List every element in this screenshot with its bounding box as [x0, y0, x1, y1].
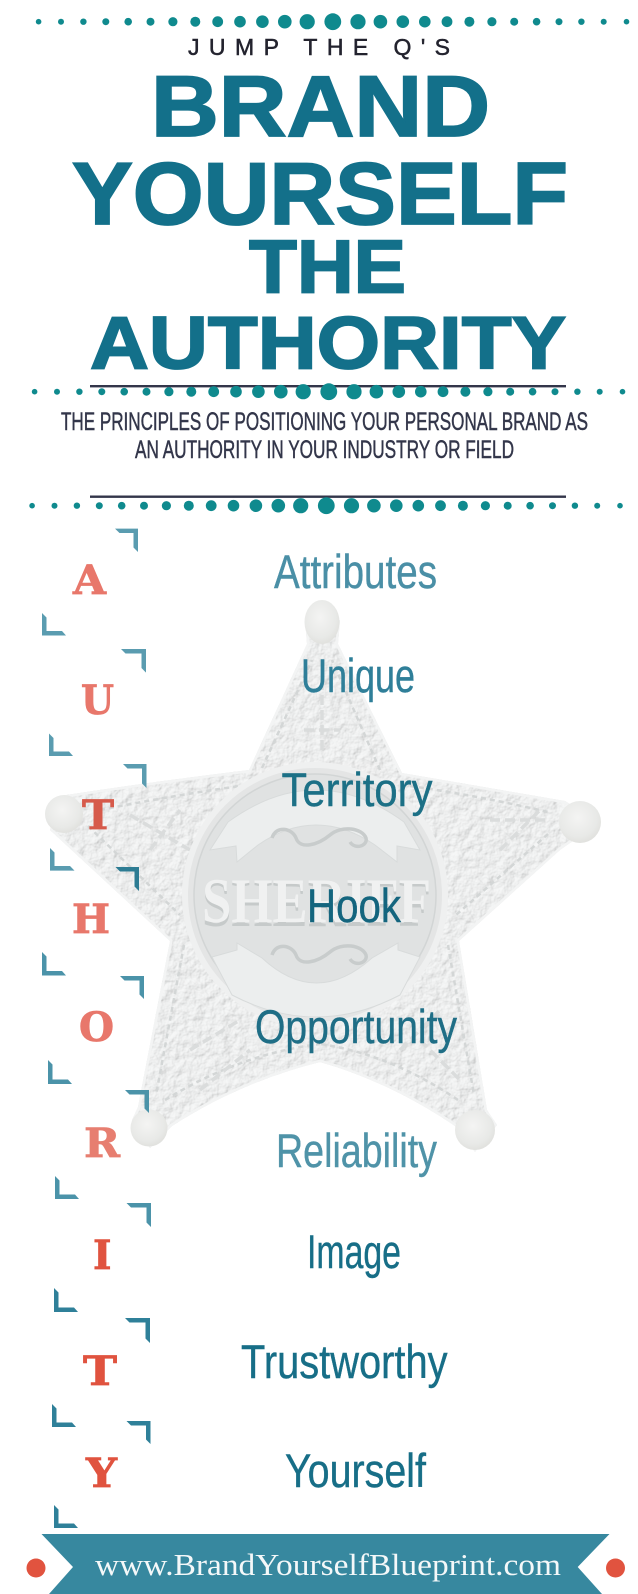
medallion: SHERIFF — [202, 865, 431, 936]
divider line: lower — [90, 496, 566, 498]
acrostic words: Reliability — [276, 1124, 437, 1177]
acrostic words: Yourself — [285, 1444, 427, 1497]
ribbon dots — [26, 1558, 625, 1578]
acrostic letters: AUTHORITY: U — [81, 677, 114, 724]
acrostic words: Hook — [307, 879, 401, 932]
acrostic words: Image — [307, 1225, 401, 1278]
kicker: Jump the Q's: JUMP THE Q'S — [188, 34, 450, 60]
acrostic letters: AUTHORITY — [72, 557, 121, 1497]
acrostic words: Unique — [301, 649, 415, 702]
star tips — [45, 600, 601, 1150]
acrostic letters: AUTHORITY: A — [72, 557, 107, 604]
subtitle — [61, 408, 588, 464]
medallion: SHERIFF — [202, 868, 431, 941]
footer url: www.BrandYourselfBlueprint.com — [95, 1547, 561, 1582]
sheriff badge — [40, 590, 610, 1160]
star body — [50, 620, 572, 1152]
acrostic words: Trustworthy — [241, 1335, 448, 1388]
acrostic letters: AUTHORITY: H — [72, 896, 110, 943]
acrostic letters: AUTHORITY: O — [79, 1004, 114, 1051]
dot row: top — [36, 13, 629, 30]
dot row: lower — [29, 497, 623, 514]
footer ribbon — [42, 1534, 610, 1594]
acrostic words: Territory — [282, 763, 433, 816]
acrostic words — [241, 545, 457, 1497]
acrostic letters: AUTHORITY: T — [82, 792, 114, 839]
acrostic letters: AUTHORITY: R — [84, 1120, 121, 1167]
dot row: middle — [32, 383, 625, 400]
title: YOURSELF — [72, 144, 568, 243]
acrostic letters: AUTHORITY: Y — [85, 1450, 117, 1497]
acrostic letters: AUTHORITY: T — [83, 1348, 117, 1395]
title: BRAND — [151, 59, 490, 155]
acrostic words: Opportunity — [255, 1000, 457, 1053]
title: AUTHORITY — [90, 302, 566, 384]
title: THE — [249, 224, 406, 308]
corner brackets — [42, 529, 151, 1528]
medallion — [185, 765, 445, 1025]
acrostic letters: AUTHORITY: I — [93, 1232, 112, 1279]
divider line: upper — [90, 385, 566, 387]
title — [72, 59, 568, 384]
acrostic words: Attributes — [274, 545, 437, 598]
